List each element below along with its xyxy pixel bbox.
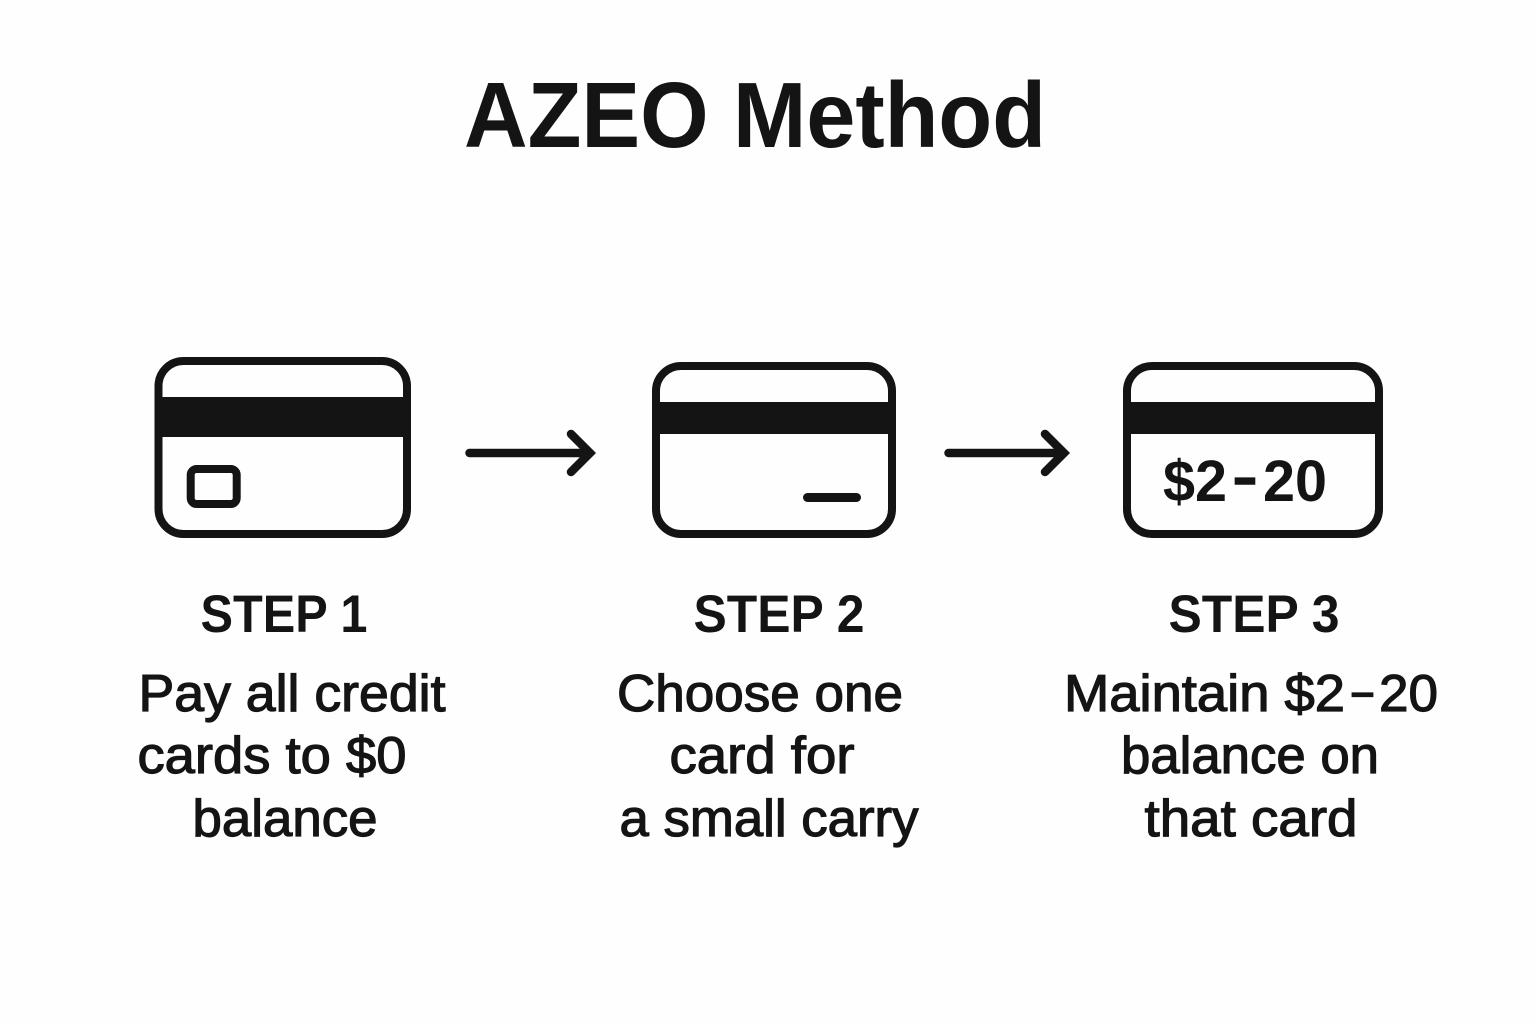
step 2 text: a small carry bbox=[620, 790, 918, 848]
step 3 text: balance on bbox=[1121, 727, 1379, 785]
icon: card 3: 20 bbox=[1263, 449, 1327, 514]
step 3 text bbox=[1064, 585, 1438, 848]
icon: card 1 bbox=[154, 361, 411, 534]
step 1 text: Pay all credit bbox=[138, 665, 446, 723]
step 3 text: STEP 3 bbox=[1168, 585, 1340, 644]
step 2 text bbox=[617, 585, 918, 848]
icon: card 2 bbox=[652, 366, 896, 534]
step 1 text: cards to $0 bbox=[138, 727, 406, 785]
title: AZEO Method bbox=[464, 63, 1046, 167]
step 2 text: card for bbox=[670, 727, 854, 785]
icon: card 3: $2 bbox=[1163, 449, 1227, 514]
step 1 text: balance bbox=[192, 790, 378, 848]
icon: card 3: – bbox=[1234, 445, 1256, 510]
step 2 text: Choose one bbox=[617, 665, 903, 723]
step 3 text: 20 bbox=[1379, 665, 1438, 723]
step 3 text: – bbox=[1352, 662, 1373, 720]
step 3 text: that card bbox=[1144, 790, 1358, 848]
arrow: step 2 to step 3 bbox=[948, 434, 1064, 472]
step 3 text: Maintain $2 bbox=[1064, 665, 1345, 723]
step 1 text: STEP 1 bbox=[200, 585, 368, 644]
step 2 text: STEP 2 bbox=[694, 585, 864, 644]
icon: card 3 bbox=[1123, 366, 1383, 534]
arrow: step 1 to step 2 bbox=[470, 434, 590, 472]
step 1 text bbox=[138, 585, 446, 848]
